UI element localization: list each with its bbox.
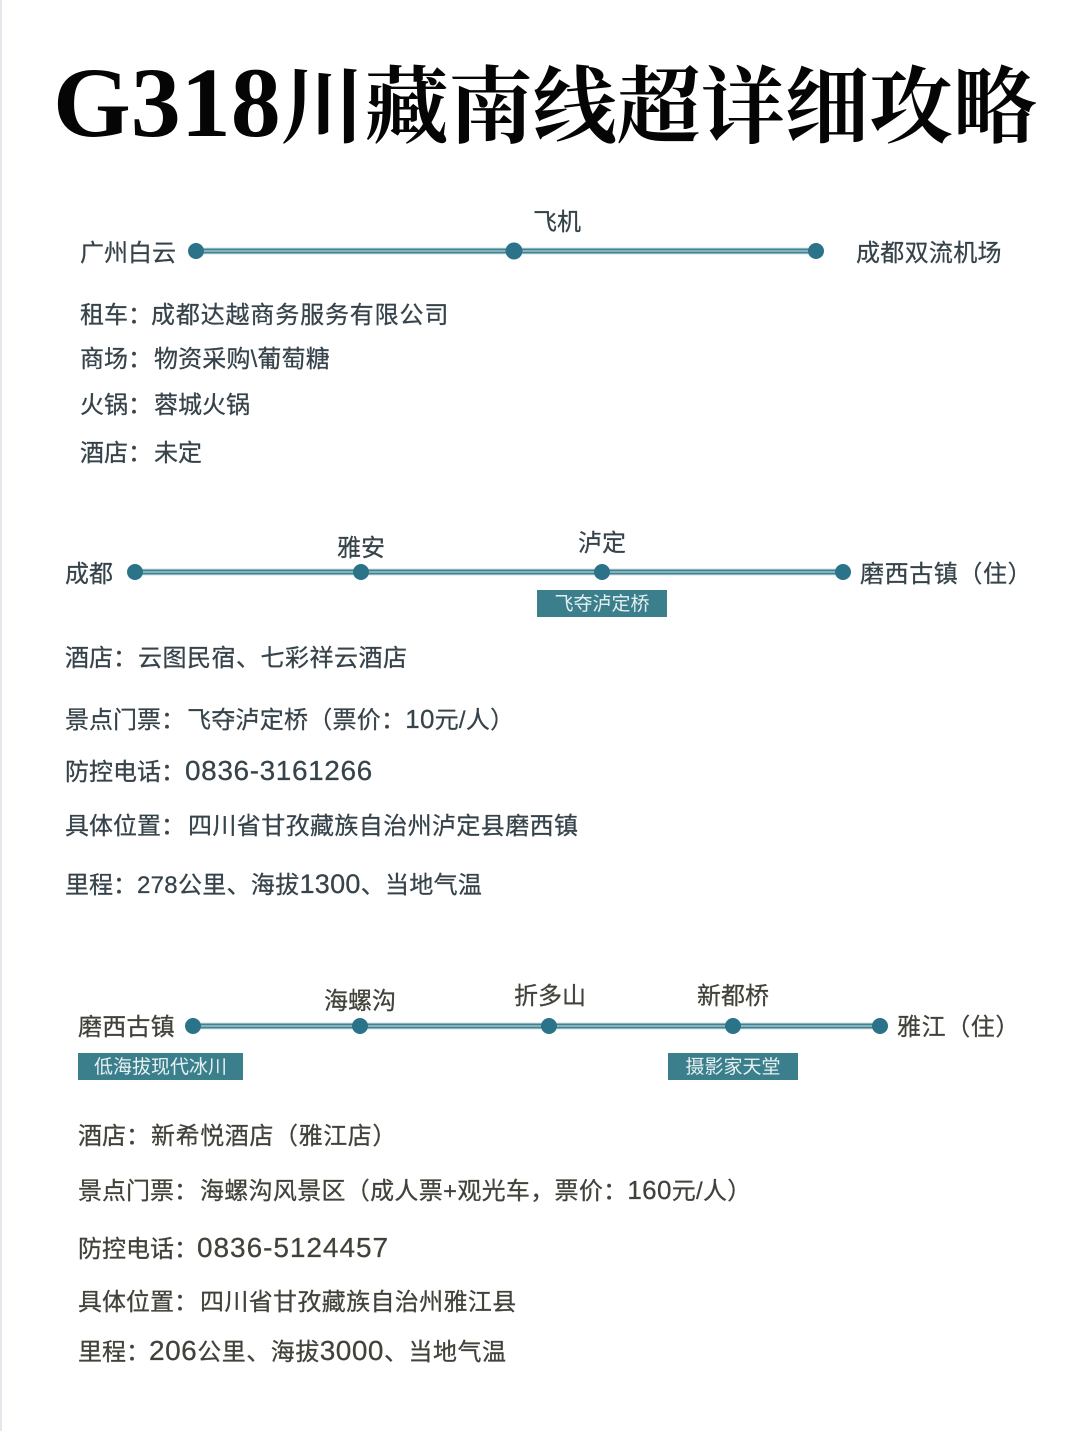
- hotpot: 蓉城火锅: [154, 392, 250, 419]
- hotline: [78, 1232, 389, 1263]
- hotel: 云图民宿、七彩祥云酒店: [138, 645, 408, 672]
- panel: day 2 route: [65, 530, 1032, 899]
- hotline: 防控电话：: [78, 1236, 198, 1263]
- mileage: 206公里、海拔3000、当地气温: [149, 1335, 507, 1366]
- stop: Moxi old town: 磨西古镇（住）: [860, 561, 1032, 588]
- title: G318川藏南线超详细攻略: [53, 47, 1037, 158]
- car rental: 成都达越商务服务有限公司: [151, 302, 449, 329]
- ticket: 飞夺泸定桥（票价：10元/人）: [187, 704, 514, 734]
- stop: Guangzhou Baiyun: 广州白云: [80, 240, 176, 267]
- shopping: 商场：: [80, 346, 152, 373]
- panel: day 3 route: [78, 983, 1020, 1366]
- hotel: 新希悦酒店（雅江店）: [151, 1123, 397, 1150]
- route line: Chengdu to Moxi: [127, 564, 851, 580]
- stop: Xinduqiao: 新都桥: [697, 983, 769, 1010]
- location: 四川省甘孜藏族自治州雅江县: [200, 1289, 517, 1316]
- tag: low altitude glacier: [78, 1053, 243, 1080]
- mileage: 里程：: [78, 1339, 150, 1366]
- shopping: 物资采购\葡萄糖: [154, 346, 330, 373]
- hotel: 酒店：: [78, 1123, 150, 1150]
- location: 具体位置：: [65, 813, 185, 840]
- hotel: 未定: [154, 440, 202, 467]
- hotel: 酒店：: [65, 645, 137, 672]
- hotel: 酒店：: [80, 440, 152, 467]
- location: 四川省甘孜藏族自治州泸定县磨西镇: [188, 813, 578, 840]
- stop: flight: 飞机: [533, 209, 581, 236]
- hotel: [80, 440, 202, 467]
- tag: low altitude glacier: 低海拔现代冰川: [94, 1057, 227, 1078]
- stop: Hailuogou: 海螺沟: [324, 988, 396, 1015]
- tag: photographers' paradise: 摄影家天堂: [685, 1057, 780, 1078]
- stop: Zheduo mountain: 折多山: [514, 983, 586, 1010]
- stop: Chengdu Shuangliu airport: 成都双流机场: [856, 240, 1002, 267]
- stop: Luding: 泸定: [578, 530, 626, 557]
- route line: Moxi to Yajiang: [185, 1018, 888, 1034]
- tag: Luding bridge: [537, 590, 667, 617]
- car rental: 租车：: [80, 302, 152, 329]
- tag: photographers' paradise: [668, 1053, 798, 1080]
- stop: Moxi old town: 磨西古镇: [78, 1014, 175, 1041]
- hotline: 0836-5124457: [197, 1232, 389, 1263]
- ticket: 海螺沟风景区（成人票+观光车，票价：160元/人）: [200, 1175, 752, 1205]
- hotline: 0836-3161266: [185, 755, 373, 786]
- tag: Luding bridge: 飞夺泸定桥: [554, 594, 650, 615]
- hotpot: 火锅：: [80, 392, 152, 419]
- hotpot: [80, 392, 250, 419]
- hotline: [65, 755, 373, 786]
- mileage: 278公里、海拔1300、当地气温: [137, 869, 482, 899]
- stop: Ya'an: 雅安: [337, 535, 385, 562]
- stop: Yajiang: 雅江（住）: [897, 1014, 1020, 1041]
- route line: Guangzhou to Chengdu: [188, 242, 824, 260]
- ticket: 景点门票：: [65, 707, 185, 734]
- panel: day 1 route: [80, 209, 1002, 467]
- stop: Chengdu: 成都: [65, 561, 113, 588]
- mileage: 里程：: [65, 872, 137, 899]
- location: 具体位置：: [78, 1289, 198, 1316]
- hotline: 防控电话：: [65, 759, 185, 786]
- ticket: 景点门票：: [78, 1178, 198, 1205]
